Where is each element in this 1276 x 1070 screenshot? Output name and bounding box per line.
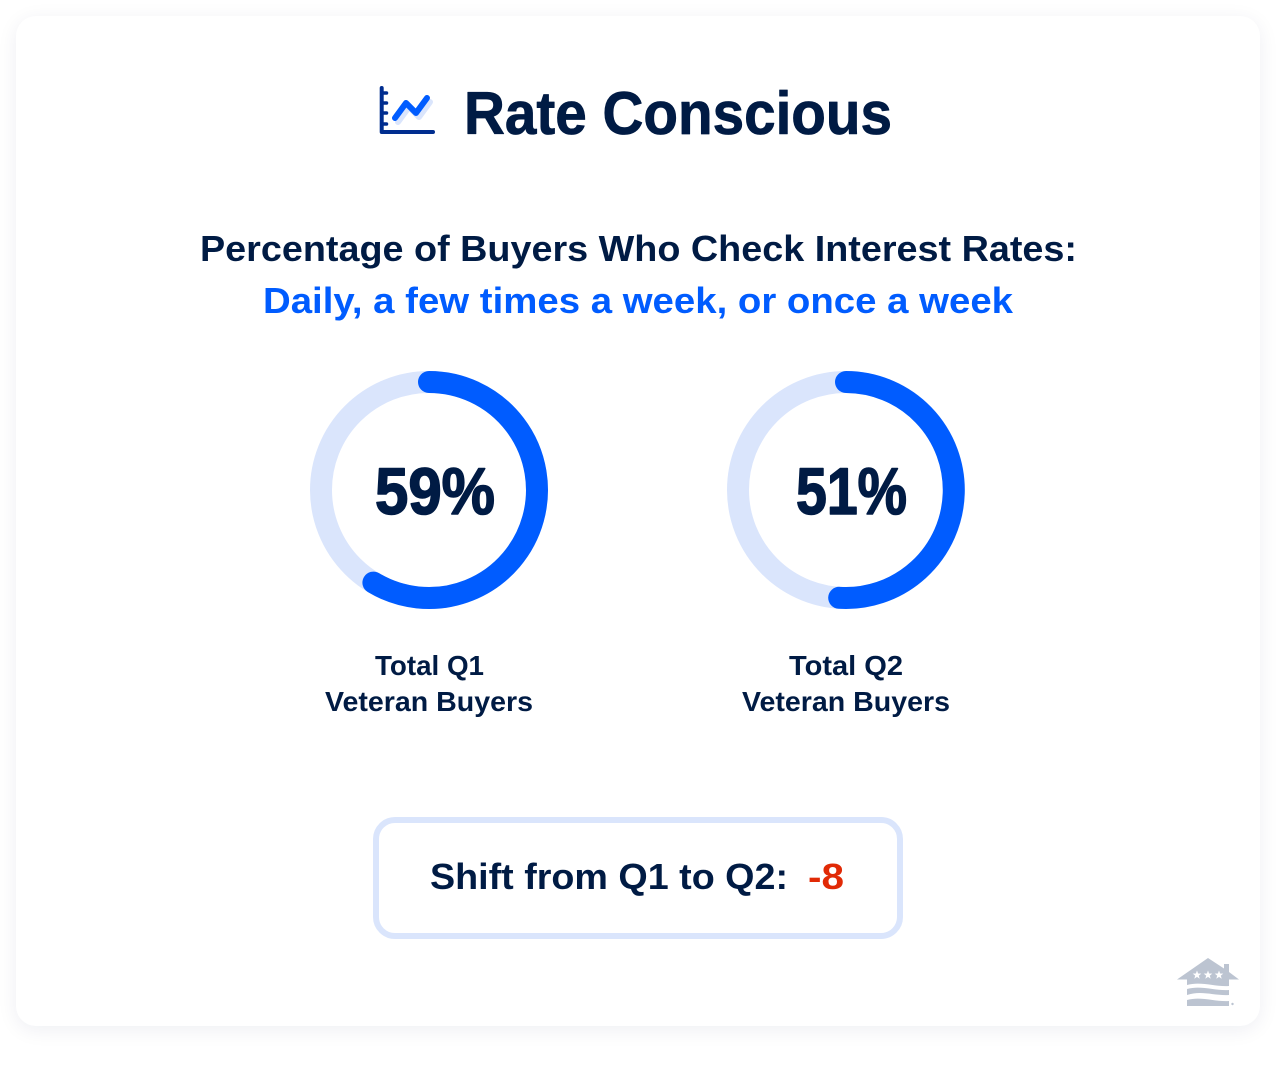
value: 59%: 59% — [375, 454, 495, 528]
label: Q1 — [325, 650, 533, 717]
callout: shift from Q1 to Q2: -8 — [808, 856, 844, 897]
label: Q2: Total Q2 — [789, 650, 903, 681]
subtitle: frequency: Daily, a few times a week, or once a week — [263, 280, 1014, 321]
chart: Q2 donut — [738, 382, 954, 598]
icon: line chart — [382, 88, 433, 132]
label: Q2 — [742, 650, 950, 717]
icon: logo stars — [1193, 970, 1223, 979]
label: Q1: Total Q1 — [375, 650, 484, 681]
value: 51%: 51% — [796, 454, 907, 528]
icon: logo house — [1177, 958, 1239, 1006]
callout: shift from Q1 to Q2 — [376, 820, 900, 936]
label: Q2: Veteran Buyers — [742, 686, 950, 717]
label: Q1: Veteran Buyers — [325, 686, 533, 717]
callout: shift from Q1 to Q2: Shift from Q1 to Q2: — [430, 856, 788, 897]
chart: Q1 donut — [321, 382, 537, 598]
title: Rate Conscious — [464, 80, 892, 147]
subtitle: Percentage of Buyers Who Check Interest Rates: — [200, 228, 1077, 269]
